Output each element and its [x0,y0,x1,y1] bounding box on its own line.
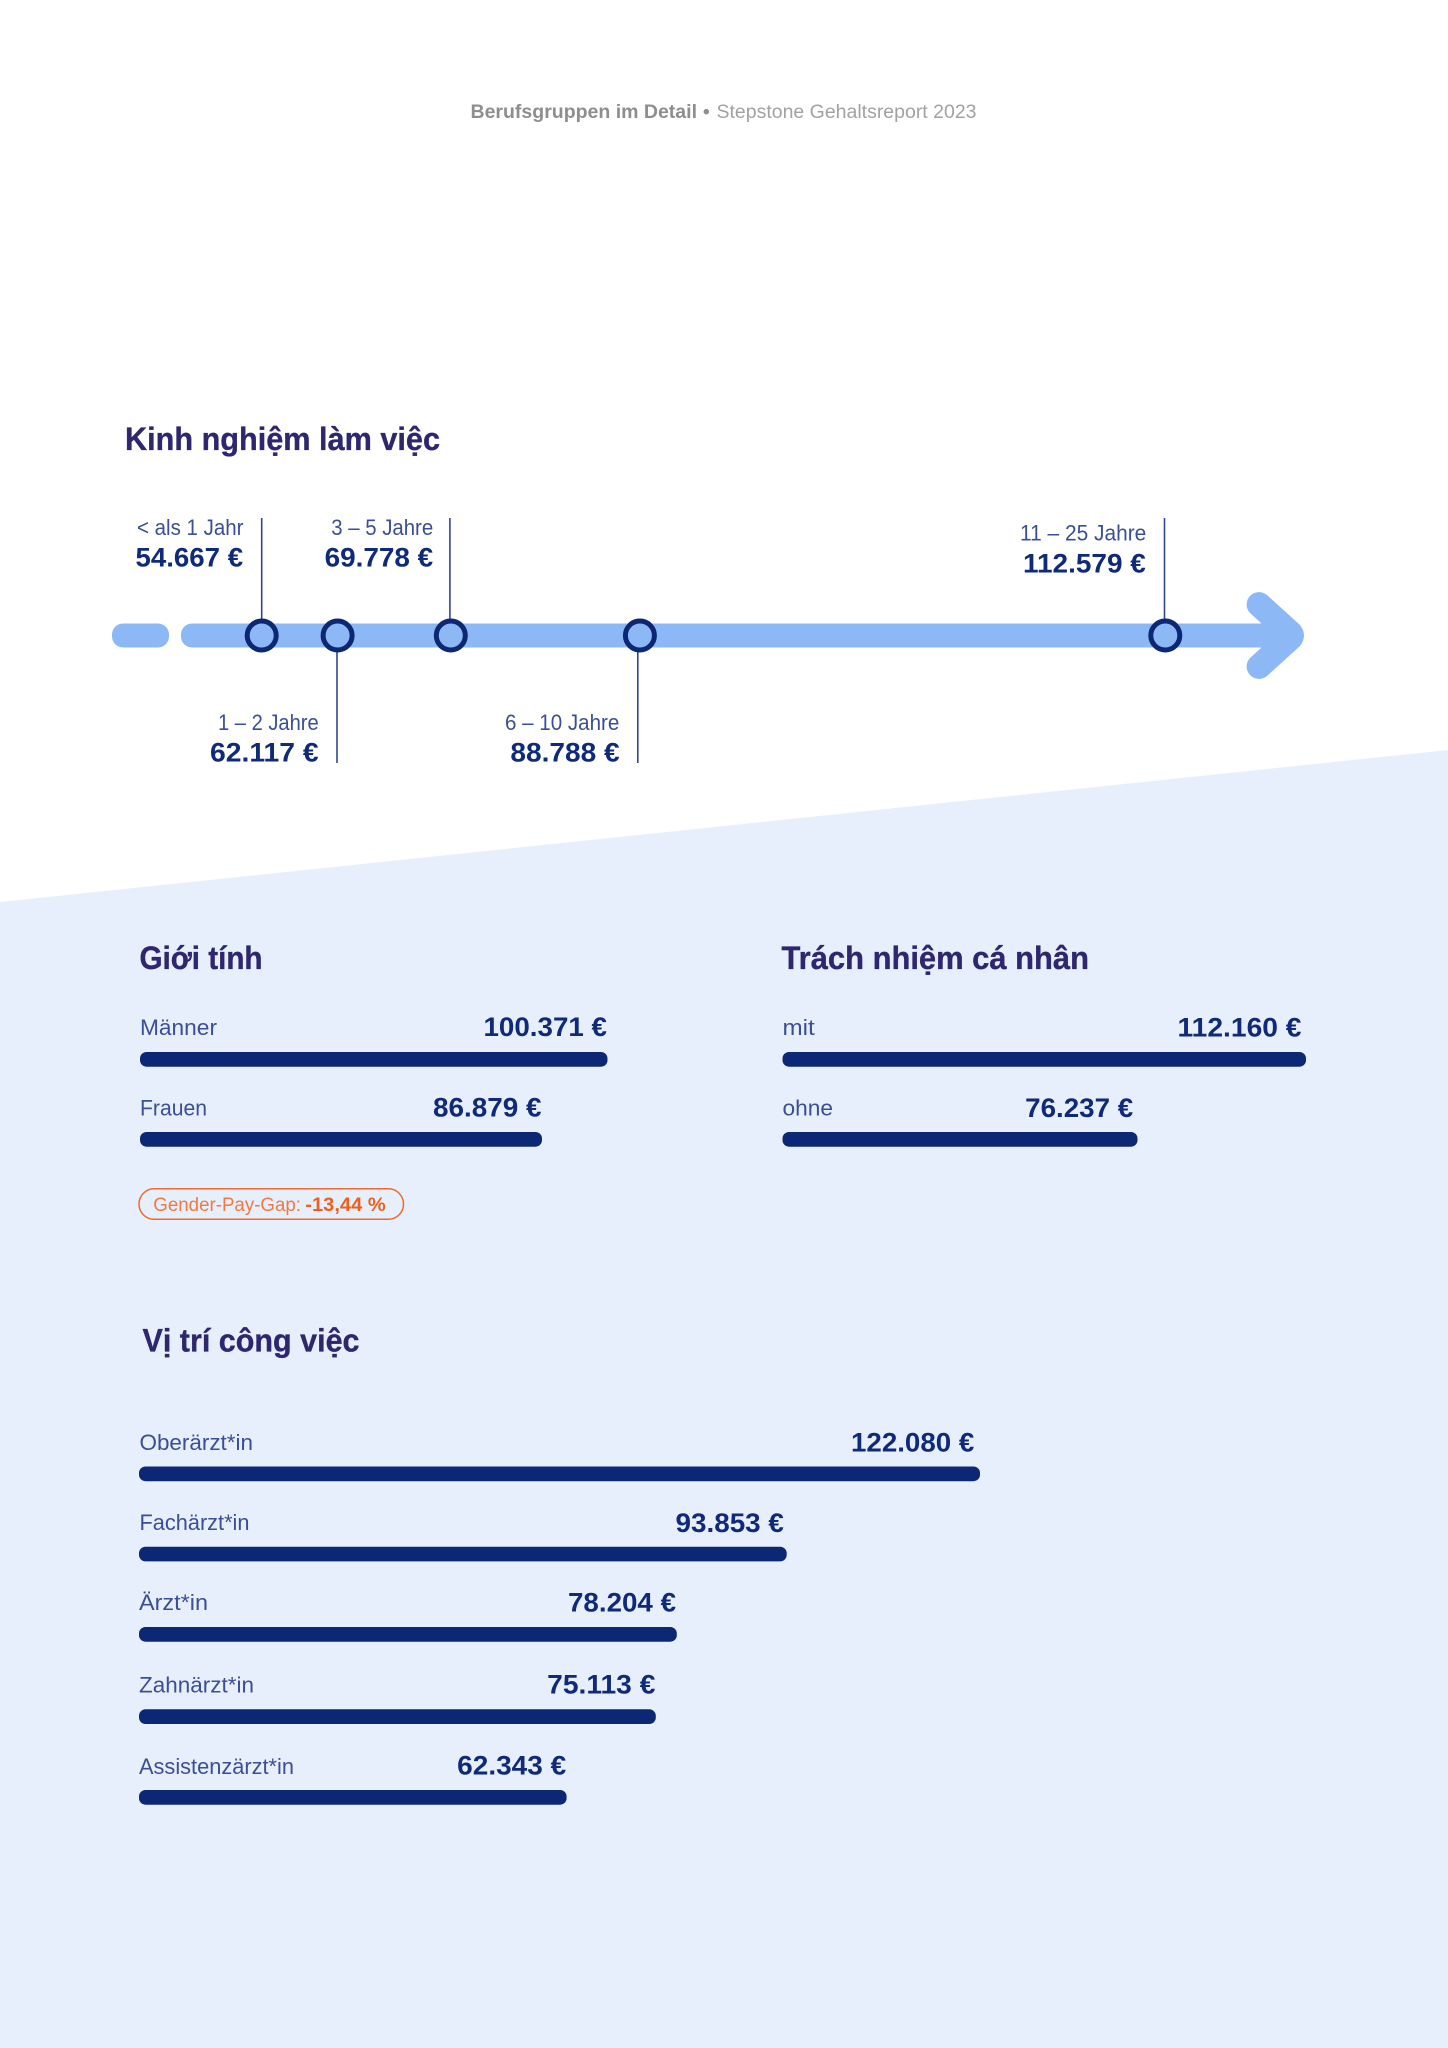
milestone: 6 to 10 years: 6 – 10 Jahre [505,710,619,735]
heading: personnel responsibility: Trách nhiệm cá nhân [782,940,1089,976]
bar: physician: Ärzt*in [139,1590,208,1615]
milestone: under 1 year [136,515,276,650]
bar: without responsibility [782,1093,1138,1147]
bar: without responsibility: ohne [782,1096,833,1121]
bar: men: 100.371 € [484,1012,607,1042]
bar: specialist physician: Fachärzt*in [140,1510,250,1535]
milestone: 1 to 2 years [210,621,352,768]
bar: men: Männer [140,1015,217,1040]
bar: with responsibility: 112.160 € [1178,1012,1302,1042]
header line: Stepstone Gehaltsreport 2023 [716,102,976,123]
milestone: 11 to 25 years: 112.579 € [1023,548,1146,578]
bar: senior physician [139,1427,980,1481]
bar: women: 86.879 € [433,1093,542,1123]
bar: senior physician: Oberärzt*in [140,1430,253,1455]
bar: specialist physician [139,1508,787,1561]
panel: personnel responsibility [782,940,1306,1147]
bar: assistant physician: Assistenzärzt*in [139,1754,294,1779]
panel: job position [139,1323,980,1805]
callout: gender pay gap: -13,44 % [305,1195,386,1216]
header line [470,102,976,123]
bar: with responsibility [782,1012,1306,1067]
background panel: slanted light blue area [0,750,1448,2048]
bar: senior physician: 122.080 € [851,1427,975,1457]
heading: gender: Giới tính [140,940,262,976]
bar: dentist: 75.113 € [547,1670,656,1700]
timeline arrow [112,592,1304,679]
milestone: 6 to 10 years [505,621,654,768]
bar: women: Frauen [140,1096,207,1121]
bar: assistant physician [139,1751,567,1805]
header line: Berufsgruppen im Detail [470,102,697,123]
milestone: 11 to 25 years: 11 – 25 Jahre [1020,521,1146,546]
header line: • [703,102,710,123]
milestone: 1 to 2 years: 1 – 2 Jahre [218,710,319,735]
bar: physician [139,1588,677,1642]
milestone: under 1 year: < als 1 Jahr [137,515,244,540]
bar: assistant physician: 62.343 € [457,1751,566,1781]
milestone: 11 to 25 years [1020,518,1180,650]
heading: work experience: Kinh nghiệm làm việc [125,421,440,457]
bar: with responsibility: mit [782,1015,815,1040]
callout: gender pay gap: Gender-Pay-Gap: [153,1195,301,1216]
bar: dentist [139,1670,656,1724]
bar: specialist physician: 93.853 € [676,1508,784,1538]
bar: without responsibility: 76.237 € [1025,1093,1133,1123]
milestone: 3 to 5 years [325,515,465,650]
milestone: 1 to 2 years: 62.117 € [210,738,319,768]
bar: women [140,1093,542,1147]
panel: work experience [112,421,1304,768]
bar: physician: 78.204 € [568,1588,676,1618]
panel: gender [139,940,608,1219]
milestone: 3 to 5 years: 69.778 € [325,543,433,573]
milestone: 3 to 5 years: 3 – 5 Jahre [331,515,433,540]
bar: men [140,1012,608,1067]
heading: job position: Vị trí công việc [142,1323,360,1359]
bar: dentist: Zahnärzt*in [139,1673,254,1698]
milestone: 6 to 10 years: 88.788 € [510,738,620,768]
callout: gender pay gap [139,1189,404,1219]
milestone: under 1 year: 54.667 € [136,543,243,573]
